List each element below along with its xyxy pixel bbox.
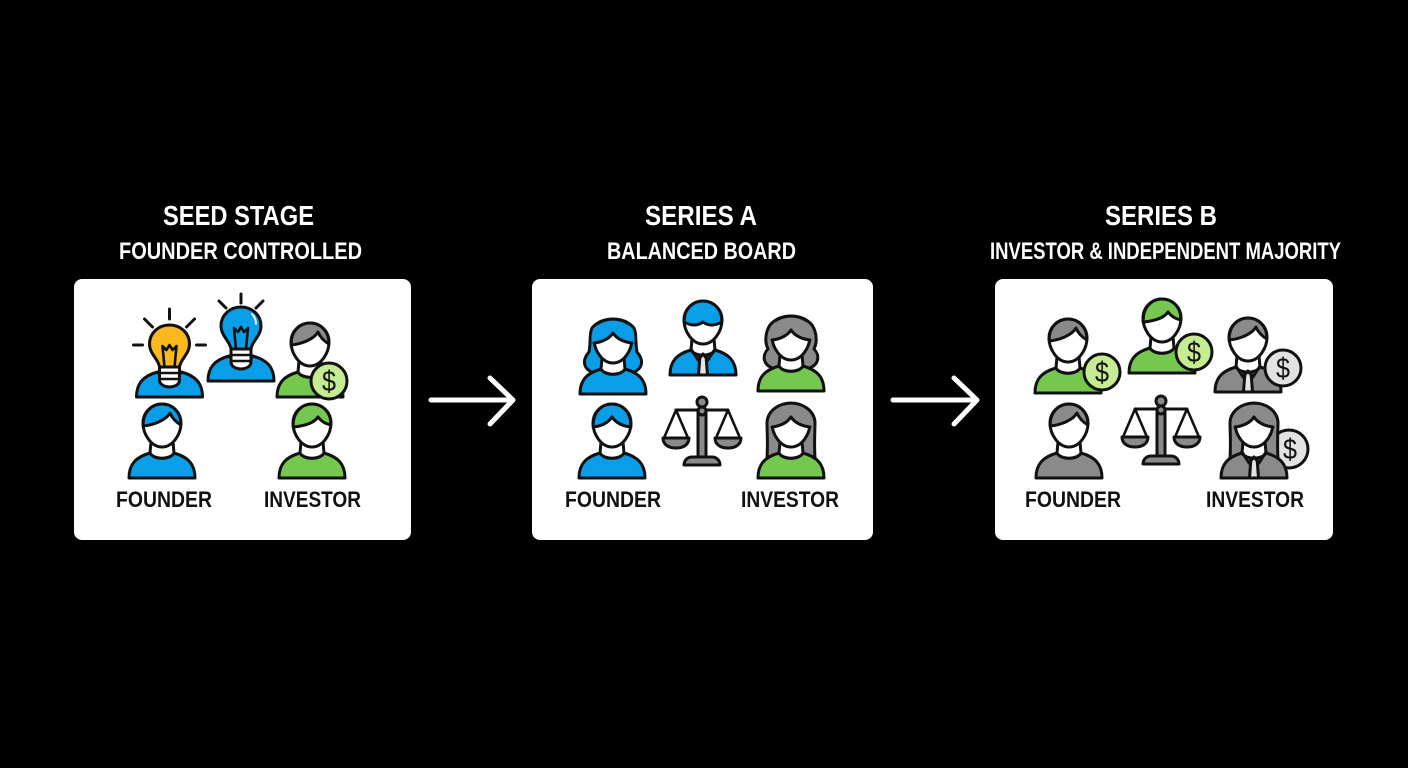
card: series a [532,279,873,540]
icon: woman founder blue [580,319,646,394]
heading: seed stage: SEED STAGE [163,200,314,231]
icon: investor green hair with green coin [1129,299,1212,373]
card: series b [995,279,1333,540]
icon: man in suit blue [670,301,736,375]
icon: balance scale [1122,396,1200,464]
icon: woman wavy grey hair [758,316,824,391]
label: investor: INVESTOR [741,487,839,512]
icon: investor with coin: $ [322,366,336,398]
icon: blue idea bulb founder [208,294,274,381]
icon: investor with coin [277,323,347,399]
icon: founder grey [1036,404,1102,478]
panel: series a [532,200,873,540]
icon: investor grey hair with green coin: $ [1095,357,1109,389]
label: founder: FOUNDER [565,487,661,512]
icon: independent in suit with grey coin: $ [1276,353,1290,385]
panel: series b [990,200,1341,540]
label: founder: FOUNDER [116,487,212,512]
icon: investor green hair with green coin: $ [1187,337,1201,369]
subheading: balanced board: BALANCED BOARD [607,238,796,265]
subheading: founder controlled: FOUNDER CONTROLLED [119,238,362,265]
icon: woman in suit with coin [1221,403,1308,478]
icon: woman in suit with coin: $ [1283,434,1297,466]
icon: founder [129,404,195,478]
arrow: seed to series a [431,378,513,424]
icon: investor [279,404,345,478]
icon: investor grey hair with green coin [1035,319,1120,393]
icon: yellow idea bulb founder [134,309,206,397]
icon: independent in suit with grey coin [1215,318,1301,392]
icon: woman investor long hair [758,403,824,478]
card: seed stage [74,279,411,540]
heading: series a: SERIES A [645,200,757,231]
arrow: series a to series b [893,378,977,424]
label: founder: FOUNDER [1025,487,1121,512]
icon: balance scale [663,397,741,465]
panel: seed stage [74,200,411,540]
heading: series b: SERIES B [1105,200,1217,231]
label: investor: INVESTOR [1206,487,1304,512]
icon: founder [579,404,645,478]
label: investor: INVESTOR [264,487,361,512]
